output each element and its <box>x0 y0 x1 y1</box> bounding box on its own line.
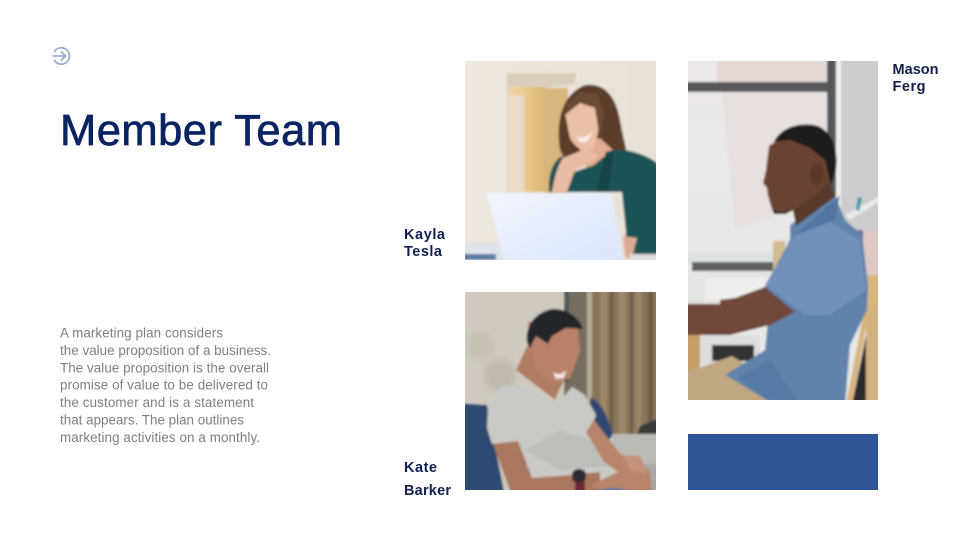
hair back <box>559 85 626 162</box>
lower room <box>688 253 772 263</box>
photo: man at desk by window <box>688 61 878 400</box>
hand <box>552 148 599 192</box>
right arm and hands <box>586 420 652 492</box>
text block: description: the value proposition of a business. <box>60 343 271 358</box>
label: Mason Ferg: Ferg <box>892 79 926 95</box>
left arm <box>493 441 600 496</box>
label: Mason Ferg: Mason <box>892 62 938 78</box>
trousers <box>688 354 770 400</box>
text block: description: promise of value to be delivered to <box>60 378 268 393</box>
label: Kate Barker: Kate <box>404 460 437 476</box>
face <box>763 132 830 213</box>
title: Member Team <box>60 107 342 155</box>
lower hand <box>623 236 637 258</box>
label: Kayla Tesla: Kayla <box>404 227 446 243</box>
hair <box>527 309 583 348</box>
sofa <box>590 398 613 445</box>
text block: description: the customer and is a statement <box>60 395 254 410</box>
icon: arrow in circle <box>53 48 70 64</box>
blue rectangle panel <box>688 434 878 490</box>
photo: woman with laptop <box>465 61 656 260</box>
text block: description: The value proposition is the overall <box>60 360 269 375</box>
neck and face <box>578 136 614 169</box>
label: Kayla Tesla: Tesla <box>404 244 443 260</box>
shirt <box>487 386 617 480</box>
arm <box>680 287 795 335</box>
sweater <box>549 150 662 255</box>
laptop <box>487 193 624 264</box>
label: Kate Barker: Barker <box>404 483 451 499</box>
watch <box>572 469 586 483</box>
text block: description: that appears. The plan outlines <box>60 412 244 428</box>
hair <box>774 124 837 186</box>
photo: man on sofa <box>465 292 656 490</box>
text block: description: marketing activities on a monthly. <box>60 430 260 445</box>
label: Kate Barker <box>404 460 451 499</box>
neck <box>516 340 566 400</box>
label: Kayla Tesla <box>404 227 446 260</box>
papers <box>465 243 504 260</box>
chair <box>846 312 868 400</box>
text block: description <box>60 326 271 445</box>
text block: description: A marketing plan considers <box>60 326 223 340</box>
face <box>528 318 580 384</box>
neck <box>792 182 836 226</box>
label: Mason Ferg <box>892 62 938 95</box>
shirt <box>725 195 868 405</box>
